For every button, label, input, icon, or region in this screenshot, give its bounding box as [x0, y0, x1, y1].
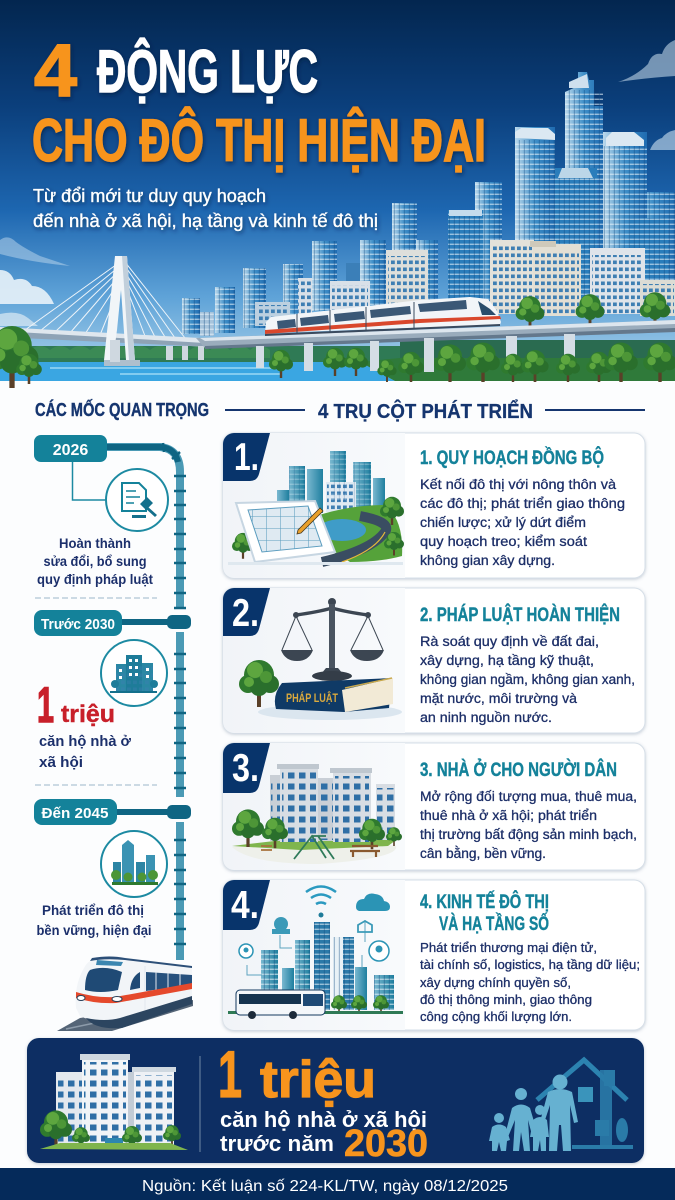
trees behind viaduct — [516, 292, 670, 330]
card 2 body: không gian ngầm, không gian xanh, — [420, 672, 635, 687]
timeline train — [57, 956, 193, 1031]
card 4 body — [420, 941, 640, 1024]
hero subtitle: đến nhà ở xã hội, hạ tầng và kinh tế đô thị — [33, 210, 378, 231]
milestone 2045 text: bền vững, hiện đại — [36, 923, 152, 938]
key figure — [218, 1037, 376, 1111]
hero subtitle — [33, 185, 378, 231]
apartment illustration — [40, 1054, 188, 1150]
milestone 2026 text — [37, 536, 153, 587]
elevated rail viaduct — [196, 320, 675, 372]
section heading: milestones: CÁC MỐC QUAN TRỌNG — [35, 399, 209, 420]
milestone 2045 text: Phát triển đô thị — [42, 903, 144, 918]
milestone 2026 text: quy định pháp luật — [37, 572, 153, 587]
card 1 number badge: 1. — [234, 436, 259, 479]
card 4 number badge — [223, 880, 270, 930]
key figure: triệu — [260, 1051, 376, 1109]
card 2 body — [420, 634, 635, 725]
milestone 2030 text — [39, 733, 131, 771]
section heading: pillars: 4 TRỤ CỘT PHÁT TRIỂN — [318, 399, 533, 423]
card 1 body: không gian xây dựng. — [420, 553, 555, 568]
key figure caption: trước năm — [220, 1131, 334, 1156]
milestone 2045 text — [36, 903, 152, 938]
hero subtitle: Từ đổi mới tư duy quy hoạch — [33, 185, 266, 206]
milestone 2026 text: sửa đổi, bổ sung — [44, 554, 146, 569]
card 4: urban economy and digital infrastructure — [223, 880, 645, 1030]
family and house icon — [489, 1060, 633, 1151]
card 3 body: thị trường bất động sản minh bạch, — [420, 827, 637, 842]
key figure: 1 — [218, 1037, 242, 1111]
card 1 body — [420, 477, 625, 568]
milestone 2030 figure: 1 million: 1 — [37, 677, 54, 733]
card 4 number badge: 4. — [231, 884, 259, 927]
milestone 2030 figure: 1 million — [37, 677, 115, 733]
card 4 heading: 4. KINH TẾ ĐÔ THỊ — [420, 891, 549, 913]
milestone 2026 pill: 2026 — [53, 442, 88, 459]
card 3 body: cân bằng, bền vững. — [420, 846, 546, 861]
card 3 number badge: 3. — [232, 747, 259, 790]
key figure caption — [220, 1107, 428, 1165]
card 2 illustration: scales on book — [239, 598, 402, 720]
bottom highlight panel — [27, 1037, 644, 1165]
card 1: planning — [223, 433, 645, 578]
card 3 number badge — [223, 743, 270, 793]
card 4 heading: VÀ HẠ TẦNG SỐ — [439, 913, 549, 935]
key figure caption: 2030 — [344, 1123, 428, 1165]
foreground trees — [0, 326, 675, 388]
card 2 body: mặt nước, môi trường và — [420, 691, 578, 706]
hero train — [265, 297, 501, 336]
card 1 heading: 1. QUY HOẠCH ĐỒNG BỘ — [420, 447, 604, 469]
milestone 2045 pill — [34, 799, 117, 825]
footer source bar: Nguồn: Kết luận số 224-KL/TW, ngày 08/12/2025 — [142, 1178, 508, 1195]
distant tree line and water — [0, 340, 675, 381]
clouds — [0, 40, 675, 326]
hero title: CHO ĐÔ THỊ HIỆN ĐẠI — [32, 107, 486, 174]
footer source bar — [0, 1168, 675, 1200]
card 4 body: tài chính số, logistics, hạ tầng dữ liệu; — [420, 958, 640, 972]
card 3: housing — [223, 743, 645, 870]
milestone 2026 text: Hoàn thành — [59, 536, 131, 551]
card 4 body: xây dựng chính quyền số, — [420, 976, 571, 990]
card 2 illustration: scales on book: PHÁP LUẬT — [286, 690, 339, 705]
milestone 2030 pill: Trước 2030 — [41, 616, 115, 633]
skyline: glass towers — [182, 72, 675, 336]
milestone 2030 text: xã hội — [39, 754, 83, 771]
card 2 body: xây dựng, hạ tầng kỹ thuật, — [420, 653, 594, 668]
card 3 heading: 3. NHÀ Ở CHO NGƯỜI DÂN — [420, 759, 617, 781]
milestone 2045 pill: Đến 2045 — [42, 805, 108, 822]
milestone 2030 figure: 1 million: triệu — [61, 701, 115, 728]
key figure caption: căn hộ nhà ở xã hội — [220, 1107, 427, 1132]
card 1 body: chiến lược; xử lý dứt điểm — [420, 515, 586, 530]
card 1 body: các đô thị; phát triển giao thông — [420, 496, 625, 511]
card 3 body — [420, 789, 637, 861]
card 2: law — [223, 588, 645, 733]
hero title: 4 — [34, 29, 77, 112]
card 2 body: Rà soát quy định về đất đai, — [420, 634, 599, 649]
hero title — [32, 29, 486, 174]
card 1 body: Kết nối đô thị với nông thôn và — [420, 477, 617, 492]
card 1 body: quy hoạch treo; kiểm soát — [420, 534, 587, 549]
card 1 illustration — [228, 451, 404, 565]
card 1 number badge — [223, 433, 270, 481]
milestone 2030 icon — [101, 640, 167, 706]
milestone 2026 pill — [34, 435, 107, 462]
milestone 2030 text: căn hộ nhà ở — [39, 733, 131, 750]
card 2 number badge: 2. — [232, 592, 259, 635]
card 4 body: Phát triển thương mại điện tử, — [420, 941, 597, 955]
cable-stayed bridge — [0, 256, 210, 366]
card 4 body: công cộng khối lượng lớn. — [420, 1010, 572, 1024]
card 2 body: an ninh nguồn nước. — [420, 710, 552, 725]
card 4 body: đô thị thông minh, giao thông — [420, 993, 592, 1007]
hero banner — [0, 0, 675, 388]
milestone 2026 connector and icon — [72, 462, 168, 531]
card 2 number badge — [223, 588, 270, 636]
card 3 body: thuê nhà ở xã hội; phát triển — [420, 808, 597, 823]
card 3 body: Mở rộng đối tượng mua, thuê mua, — [420, 789, 637, 804]
milestone 2030 pill — [34, 610, 122, 636]
card 4 heading — [420, 891, 549, 935]
card 3 illustration: apartments and park — [232, 764, 402, 864]
milestone 2045 icon — [101, 831, 167, 897]
card 4 illustration: smart city — [228, 886, 403, 1019]
skyline: pale mid-rise blocks — [255, 240, 675, 326]
hero title: ĐỘNG LỰC — [97, 38, 318, 105]
timeline pipe — [107, 443, 191, 960]
card 2 heading: 2. PHÁP LUẬT HOÀN THIỆN — [420, 604, 620, 626]
